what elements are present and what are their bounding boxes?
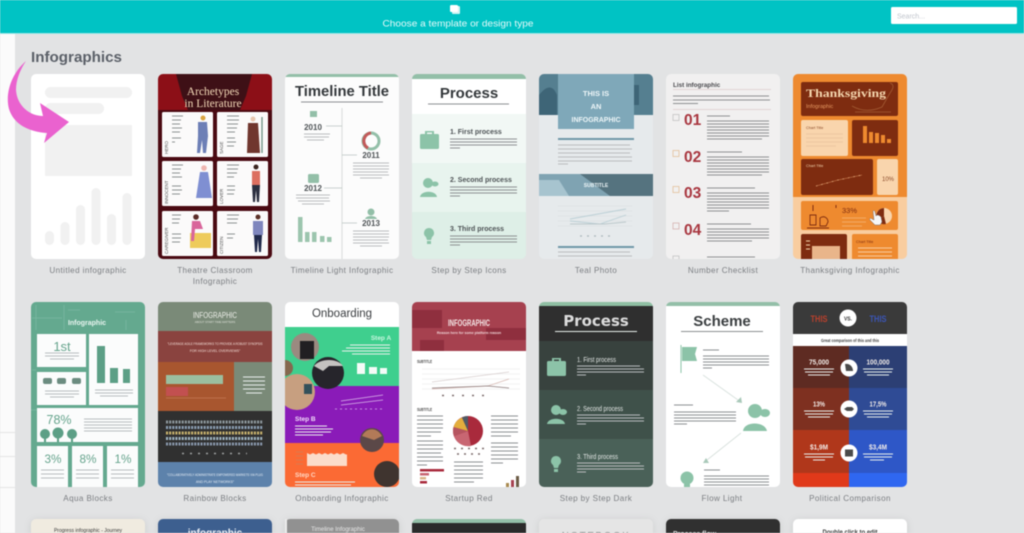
panel labels: CAREGIVER bbox=[164, 227, 169, 254]
card: Rainbow Blocks bbox=[158, 302, 272, 487]
card: Onboarding bbox=[277, 302, 400, 487]
years: 2011 bbox=[362, 151, 380, 160]
icon: flag bbox=[680, 345, 697, 373]
panel labels: SAGE bbox=[219, 141, 224, 154]
icon circles bbox=[840, 360, 858, 462]
card: Thanksgiving: 10% bbox=[882, 177, 895, 183]
card: Thanksgiving: Chart Title bbox=[806, 126, 823, 130]
caption: Theatre Classroom bbox=[177, 266, 253, 286]
panel labels: CITIZEN bbox=[219, 236, 224, 254]
card: Theatre Classroom: in Literature bbox=[184, 98, 242, 110]
icon: bulb bbox=[680, 472, 694, 487]
title: Timeline Title bbox=[295, 83, 389, 100]
card: Flow Light bbox=[666, 302, 780, 487]
panel labels: HERO bbox=[164, 140, 169, 154]
bars bbox=[97, 346, 130, 383]
chart panels bbox=[801, 120, 898, 264]
caption: Thanksgiving: Thanksgiving Infographic bbox=[800, 266, 900, 275]
banner text bbox=[572, 89, 621, 124]
title: INFOGRAPHIC bbox=[193, 310, 237, 320]
caption: Onboarding: Onboarding Infographic bbox=[295, 494, 389, 503]
pie bbox=[876, 208, 892, 224]
title: Scheme bbox=[693, 313, 751, 330]
title: Process bbox=[440, 85, 498, 102]
step headings: Step B bbox=[295, 416, 316, 423]
caption: Untitled infographic: Untitled infographic bbox=[49, 266, 127, 275]
figures: 75,000 bbox=[809, 360, 829, 366]
card: Timeline Infographic bbox=[285, 519, 399, 533]
quotes: "LEVERAGE AGILE FRAMEWORKS TO PROVIDE A ROBUST SYNOPSIS bbox=[168, 342, 263, 346]
quotes: AND PLAY NETWORKS" bbox=[196, 480, 235, 484]
caption: Political Comparison: Political Comparison bbox=[809, 494, 891, 503]
card: Progress journey bbox=[31, 519, 145, 533]
header: THIS bbox=[810, 314, 828, 325]
years: 2010 bbox=[304, 123, 322, 132]
checkboxes bbox=[673, 114, 679, 262]
title panel: Thanksgiving bbox=[806, 86, 886, 100]
food and bar illustrations bbox=[806, 205, 892, 264]
banner text: THIS IS bbox=[583, 89, 609, 98]
card: Untitled infographic bbox=[31, 74, 145, 259]
icons and donut bbox=[308, 111, 379, 219]
cars bbox=[43, 378, 81, 384]
stats: 78% bbox=[46, 412, 72, 427]
card: Aqua Blocks: Infographic bbox=[68, 320, 106, 327]
purple line chart bbox=[335, 395, 385, 409]
caption: Rainbow Blocks: Rainbow Blocks bbox=[183, 494, 247, 503]
caption: Aqua Blocks: Aqua Blocks bbox=[63, 494, 113, 503]
title: Onboarding bbox=[312, 308, 372, 320]
card: Startup Red bbox=[412, 302, 526, 487]
steps: 3. Third process bbox=[450, 226, 504, 233]
stats bbox=[44, 339, 132, 466]
banner text: AN bbox=[591, 102, 601, 111]
title: Archetypes bbox=[187, 86, 240, 98]
steps bbox=[450, 129, 512, 233]
years: 2012 bbox=[304, 184, 322, 193]
steps: 1. First process bbox=[577, 357, 616, 364]
card: Startup Red: Reason here for some platform reason bbox=[437, 331, 501, 335]
figures: $1,9M bbox=[810, 444, 828, 452]
heading: Infographics: Infographics bbox=[31, 49, 122, 66]
stats: 1% bbox=[114, 452, 132, 466]
panel labels: LOVER bbox=[219, 188, 224, 204]
card: Thanksgiving: 33% bbox=[842, 206, 857, 215]
card: Thanksgiving: Chart Title bbox=[856, 240, 873, 244]
numbers: 05 bbox=[684, 257, 702, 274]
arrow: pink pointer bbox=[8, 61, 69, 143]
card: Double click to edit bbox=[793, 519, 907, 533]
line chart bbox=[816, 175, 862, 186]
quotes: FOR HIGH LEVEL OVERVIEWS" bbox=[190, 349, 241, 353]
step headings: Step A bbox=[371, 335, 391, 342]
numbers: 03 bbox=[684, 185, 702, 202]
header bbox=[810, 310, 886, 343]
icons bbox=[420, 131, 439, 244]
card: Timeline Light bbox=[285, 74, 399, 259]
banner text: INFOGRAPHIC bbox=[572, 115, 621, 124]
subtitles bbox=[417, 359, 432, 412]
panel labels bbox=[164, 140, 224, 254]
years bbox=[304, 123, 380, 228]
caption: Startup Red: Startup Red bbox=[445, 494, 493, 503]
character figures bbox=[190, 116, 263, 252]
orange water bars bbox=[307, 453, 347, 466]
header: VS. bbox=[844, 316, 853, 322]
card: Thanksgiving: Chart Title bbox=[806, 164, 823, 168]
steps: 1. First process bbox=[450, 129, 502, 136]
line chart bbox=[570, 208, 626, 237]
icon: template squares bbox=[450, 5, 460, 14]
caption: Flow Light: Flow Light bbox=[702, 494, 743, 503]
top header bar bbox=[0, 0, 1024, 34]
card: Rainbow Blocks: ABOUT START TIME MATTERS bbox=[195, 320, 235, 324]
caption: Timeline Light: Timeline Light Infographic bbox=[291, 266, 393, 275]
title: Process bbox=[563, 312, 629, 330]
arrows bbox=[703, 375, 741, 460]
header: THIS bbox=[870, 314, 886, 325]
row 3: partially visible cards bbox=[31, 519, 907, 533]
panel labels: INNOCENT bbox=[164, 180, 169, 204]
step headings: Step C bbox=[295, 472, 316, 479]
search box bbox=[891, 7, 1017, 24]
bars bbox=[863, 126, 891, 143]
legend bbox=[454, 448, 484, 454]
figures: $3,4M bbox=[869, 444, 887, 452]
numbers: 04 bbox=[684, 222, 702, 239]
numbers: 01 bbox=[684, 112, 702, 129]
card: Step by Step Icons bbox=[412, 74, 526, 259]
numbers: 02 bbox=[684, 149, 701, 166]
dot rows bbox=[166, 422, 263, 444]
bar chart bbox=[298, 217, 332, 242]
steps bbox=[577, 357, 623, 461]
header: Great comparison of this and this bbox=[821, 338, 879, 343]
caption: Step by Step Dark: Step by Step Dark bbox=[560, 494, 633, 503]
card: Theatre Classroom bbox=[158, 74, 272, 259]
white bars bbox=[357, 363, 387, 374]
icons bbox=[547, 358, 567, 472]
title: INFOGRAPHIC bbox=[448, 318, 490, 328]
stats: 8% bbox=[80, 452, 97, 466]
left sidebar bbox=[0, 33, 15, 533]
caption: Number Checklist: Number Checklist bbox=[688, 266, 758, 275]
years: 2013 bbox=[362, 219, 380, 228]
subtitle band: SUBTITLE bbox=[584, 183, 609, 189]
stats: 1st bbox=[53, 339, 71, 354]
figures bbox=[809, 360, 890, 452]
steps: 3. Third process bbox=[577, 454, 618, 461]
card: Step by Step Dark bbox=[539, 302, 653, 487]
card: Thanksgiving bbox=[793, 74, 907, 264]
pie chart bbox=[453, 416, 483, 446]
card: dark green stripe bbox=[412, 519, 526, 533]
card: dark bbox=[666, 519, 780, 533]
title panel bbox=[801, 82, 898, 116]
icon: person bbox=[743, 404, 770, 431]
white blocks bbox=[37, 334, 138, 487]
subtitle band bbox=[539, 174, 653, 196]
small bar charts bbox=[420, 469, 519, 487]
title: List infographic bbox=[673, 82, 721, 89]
steps: 2. Second process bbox=[450, 177, 512, 184]
caption: Teal Photo: Teal Photo bbox=[575, 266, 617, 275]
card: Timeline Infographic: Timeline Infographic bbox=[311, 527, 365, 533]
card: Aqua Blocks bbox=[31, 302, 145, 487]
figures: 13% bbox=[813, 402, 826, 408]
icon: hand cursor bbox=[870, 211, 882, 225]
quotes bbox=[167, 342, 263, 484]
card: Number Checklist bbox=[666, 74, 780, 274]
step headings bbox=[295, 335, 391, 479]
title panel: Infographic bbox=[806, 104, 833, 110]
caption: Step by Step Icons: Step by Step Icons bbox=[431, 266, 507, 275]
subtitles: SUBTITLE bbox=[417, 359, 432, 364]
bar chart bbox=[166, 375, 226, 398]
figures: 100,000 bbox=[866, 360, 890, 366]
quotes: "COLLABORATIVELY ADMINISTRATE EMPOWERED MARKETS VIA PLUG bbox=[167, 473, 263, 477]
trees bbox=[40, 428, 77, 442]
search box: Search... bbox=[897, 14, 925, 20]
caption: Theatre Classroom: Theatre Classroom bbox=[177, 266, 253, 275]
card: Political Comparison bbox=[793, 302, 907, 487]
numbers bbox=[684, 113, 702, 236]
text blocks bbox=[674, 350, 769, 485]
archetype panels bbox=[162, 112, 268, 256]
steps: 2. Second process bbox=[577, 406, 623, 413]
line chart bbox=[422, 369, 520, 396]
caption: Theatre Classroom: Infographic bbox=[193, 277, 237, 286]
figures: 17,5% bbox=[870, 402, 887, 408]
card: Teal Photo bbox=[539, 74, 653, 259]
stats: 3% bbox=[44, 452, 62, 466]
subtitles: SUBTITLE bbox=[417, 407, 432, 412]
card: blue infographic bbox=[158, 519, 272, 533]
header caption: Choose a template or design type bbox=[382, 18, 534, 30]
photo circles bbox=[277, 333, 400, 487]
card: notebook bbox=[539, 519, 653, 533]
